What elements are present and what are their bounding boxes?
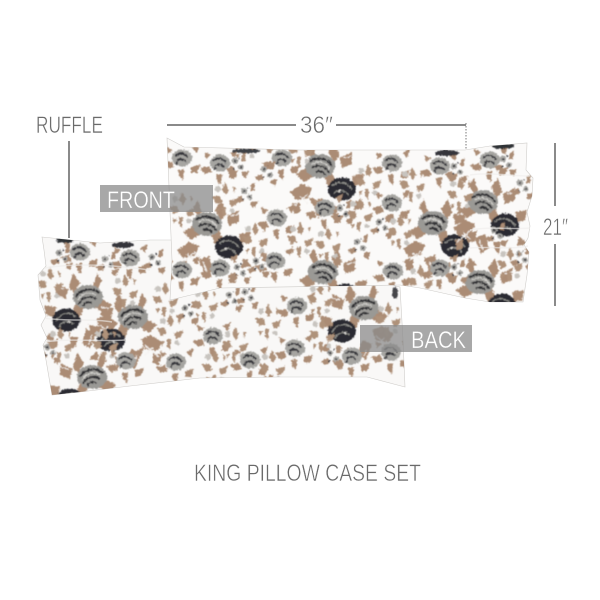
label: front	[100, 185, 213, 214]
front pillow	[166, 138, 534, 302]
infographic: king pillow case set	[37, 116, 568, 481]
back pillow	[38, 236, 406, 396]
back pillow floral print	[38, 238, 404, 395]
front pillow floral print	[167, 144, 532, 302]
label: front: FRONT	[107, 187, 175, 214]
label: ruffle: RUFFLE	[36, 112, 103, 139]
height dimension: 21 inches: 21″	[543, 214, 568, 241]
label: back: BACK	[411, 327, 466, 354]
width dimension: 36 inches: 36″	[300, 112, 333, 139]
ruffle leader line	[68, 141, 70, 238]
front pillow ruffle folds	[470, 174, 530, 248]
title: KING PILLOW CASE SET	[194, 460, 421, 487]
back pillow ruffle folds	[44, 265, 150, 342]
label: back	[360, 325, 472, 354]
